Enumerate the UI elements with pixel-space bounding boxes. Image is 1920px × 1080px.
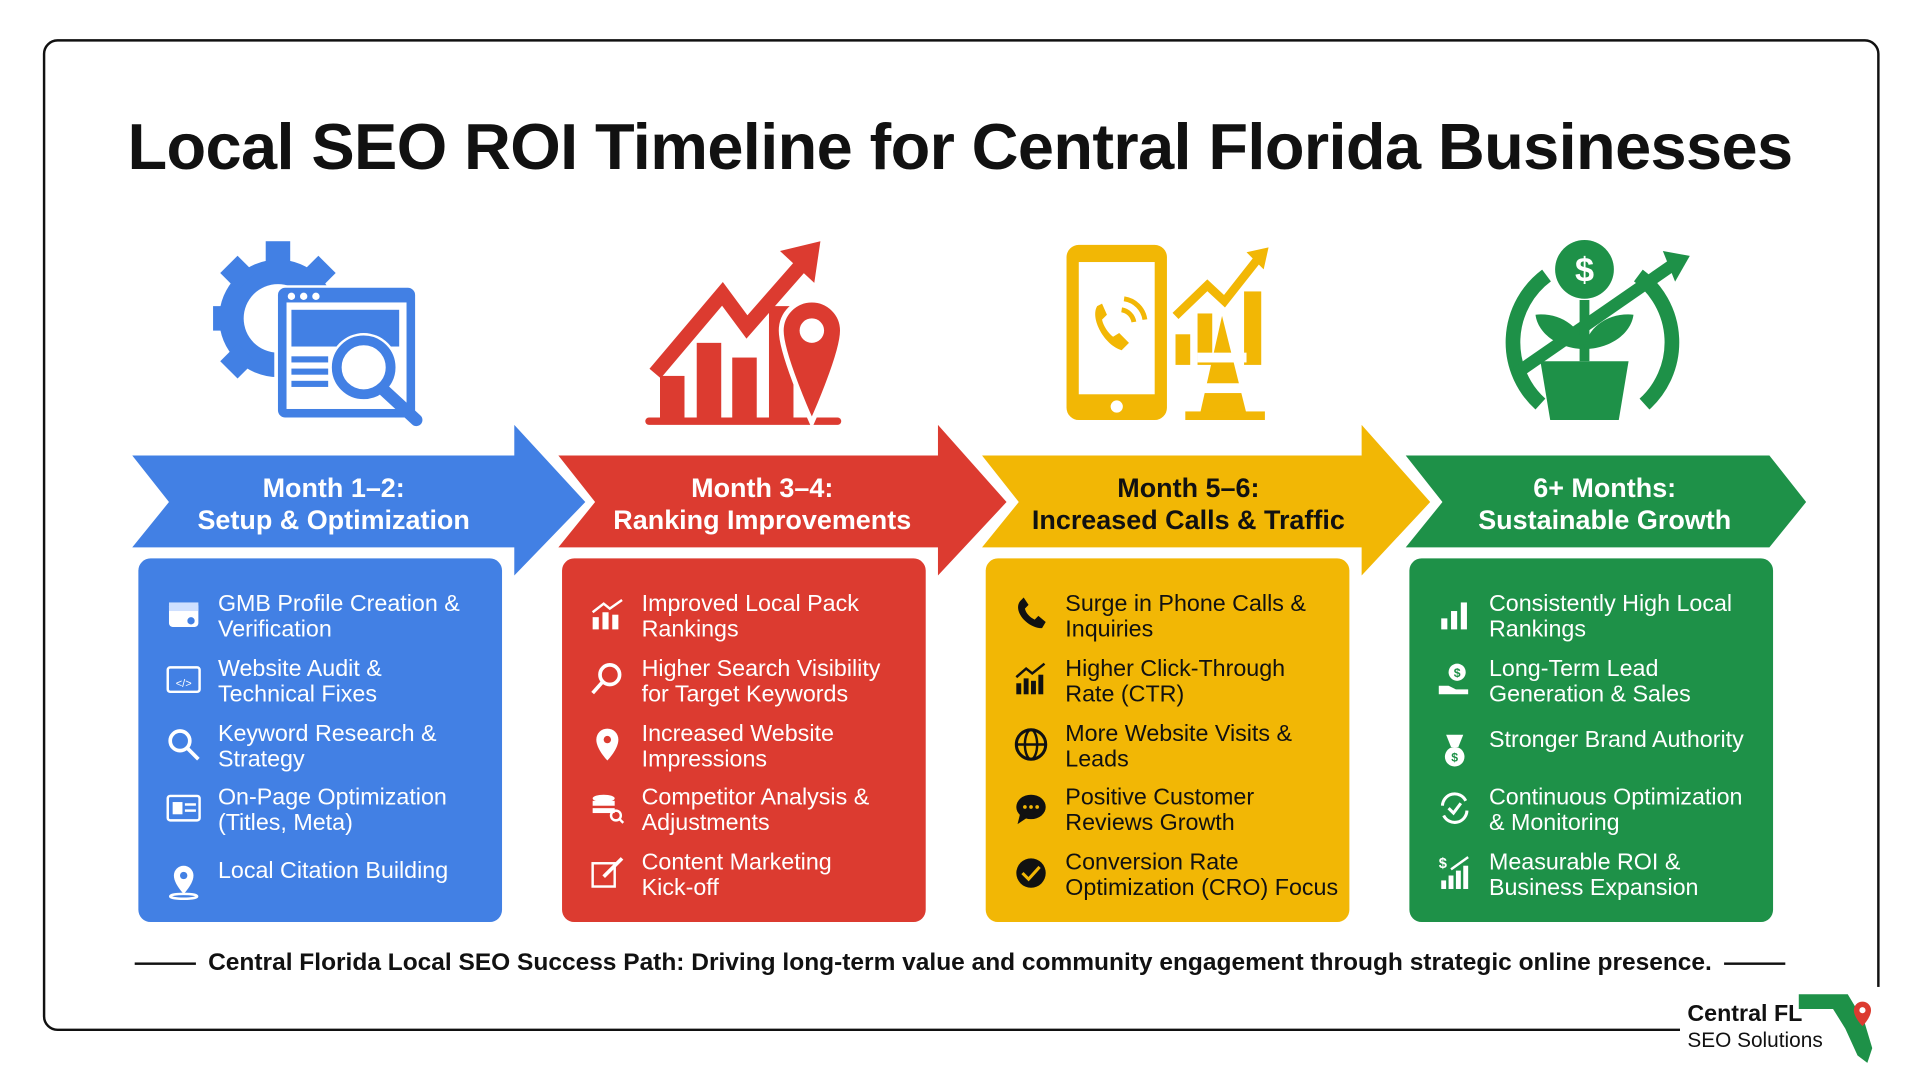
panel: 6+ months: $: [1439, 856, 1447, 872]
banner label: 6+ months: Sustainable Growth: [1478, 504, 1731, 535]
banner label: month 1-2: Month 1–2:: [263, 473, 405, 503]
panel: month 1-2: </>: [176, 678, 192, 690]
banner label: month 5-6: [1032, 473, 1345, 535]
panel: month 5-6: Optimization (CRO) Focus: [1065, 876, 1338, 901]
panel: month 1-2: GMB Profile Creation &: [218, 591, 460, 617]
panel: 6+ months: & Monitoring: [1489, 811, 1620, 836]
logo: Central FL SEO Solutions: Central FL: [1687, 1002, 1802, 1027]
panel: month 1-2: (Titles, Meta): [218, 811, 353, 836]
panel: 6+ months: Stronger Brand Authority: [1489, 727, 1744, 753]
icon: rising chart with map pin: [645, 241, 842, 425]
panel: month 3-4: [562, 558, 926, 922]
panel: month 1-2: Technical Fixes: [218, 682, 377, 708]
panel: month 1-2: Verification: [218, 617, 332, 643]
panel: month 1-2: Local Citation Building: [218, 858, 448, 884]
banner label: month 5-6: Month 5–6:: [1117, 473, 1259, 503]
panel: month 5-6: Leads: [1065, 747, 1129, 773]
panel: month 5-6: Surge in Phone Calls &: [1065, 591, 1306, 617]
panel: month 3-4: Competitor Analysis &: [642, 785, 869, 811]
logo: Central FL SEO Solutions: [1680, 987, 1888, 1068]
panel: month 3-4: Kick-off: [642, 876, 719, 901]
panel: month 1-2: Strategy: [218, 747, 305, 773]
banner label: month 5-6: Increased Calls & Traffic: [1032, 504, 1345, 535]
footer tagline: Central Florida Local SEO Success Path: Driving long-term value and community engagement through strategic online presence.: [208, 949, 1712, 976]
panel: month 1-2: Website Audit &: [218, 656, 382, 682]
icon: growth cycle with money plant: [1506, 240, 1690, 420]
arrow banners: [132, 425, 1806, 576]
panel: month 5-6: Inquiries: [1065, 617, 1153, 643]
panel: 6+ months: $: [1454, 666, 1461, 680]
panel: month 3-4: Higher Search Visibility: [642, 656, 880, 682]
banner label: month 1-2: [197, 473, 470, 535]
panel: month 3-4: Adjustments: [642, 811, 770, 836]
panel: month 3-4: Improved Local Pack: [642, 591, 859, 617]
panel: month 1-2: [138, 558, 502, 922]
banner label: 6+ months: [1478, 473, 1731, 535]
panel: 6+ months: Rankings: [1489, 617, 1586, 643]
panel: month 1-2: On-Page Optimization: [218, 785, 447, 811]
icon: gear with browser and magnifier: [213, 241, 422, 426]
icon: phone with traffic chart: [1066, 244, 1268, 420]
panel: month 5-6: Positive Customer: [1065, 785, 1254, 811]
panel: 6+ months: Consistently High Local: [1489, 591, 1732, 617]
panel: 6+ months: $: [1451, 751, 1458, 765]
panel: month 5-6: [986, 558, 1349, 922]
logo: Central FL SEO Solutions: SEO Solutions: [1687, 1029, 1823, 1052]
panel: month 3-4: Increased Website: [642, 721, 834, 747]
panel: month 3-4: Impressions: [642, 747, 767, 773]
banner label: month 3-4: [613, 473, 911, 535]
panel: month 3-4: Rankings: [642, 617, 739, 643]
panel: month 5-6: Reviews Growth: [1065, 811, 1235, 836]
icon: growth cycle with money plant: $: [1575, 252, 1594, 290]
panel: 6+ months: [1409, 558, 1773, 922]
panel: month 5-6: Higher Click-Through: [1065, 656, 1285, 682]
banner label: month 1-2: Setup & Optimization: [197, 504, 470, 535]
panel: month 5-6: More Website Visits &: [1065, 721, 1292, 747]
banner label: month 3-4: Ranking Improvements: [613, 504, 911, 535]
panel: month 5-6: Rate (CTR): [1065, 682, 1184, 708]
title: Local SEO ROI Timeline for Central Florida Businesses: [128, 111, 1792, 184]
banner label: 6+ months: 6+ Months:: [1533, 473, 1676, 503]
panel: month 5-6: Conversion Rate: [1065, 850, 1239, 876]
panel: 6+ months: Long-Term Lead: [1489, 656, 1658, 682]
panel: 6+ months: Business Expansion: [1489, 876, 1699, 901]
banner label: month 3-4: Month 3–4:: [691, 473, 833, 503]
panel: month 3-4: for Target Keywords: [642, 682, 848, 708]
panel: month 1-2: Keyword Research &: [218, 721, 436, 747]
panel: 6+ months: Continuous Optimization: [1489, 785, 1742, 811]
panel: 6+ months: Generation & Sales: [1489, 682, 1691, 708]
panel: month 3-4: Content Marketing: [642, 850, 832, 876]
panel: 6+ months: Measurable ROI &: [1489, 850, 1680, 876]
